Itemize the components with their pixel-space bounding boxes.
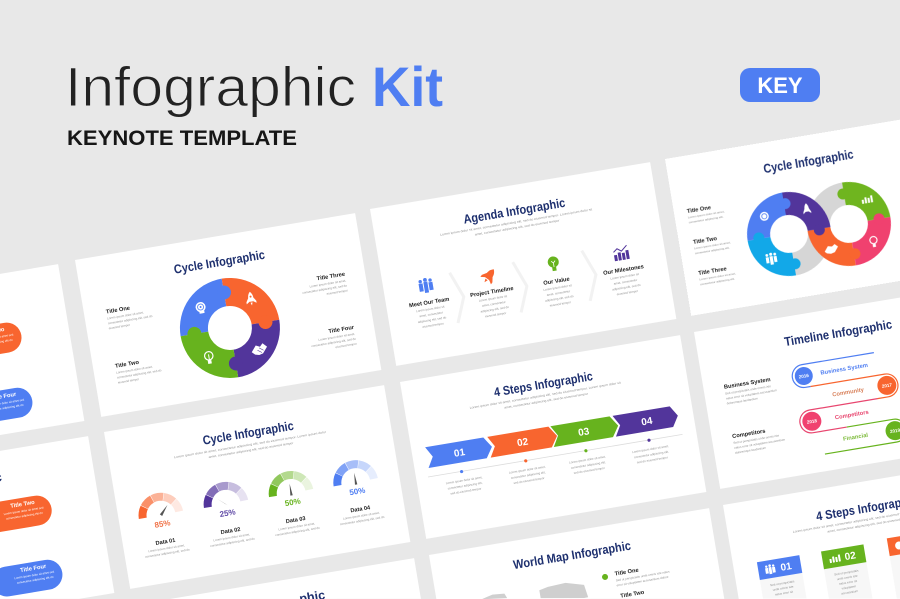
step card 02 — [821, 544, 873, 599]
column: Our Value: adipiscing elit, sed do — [545, 294, 574, 303]
milestone: 2018: 2018 — [806, 418, 818, 425]
gauge: Data 02: consectetur adipiscing elit, sed do — [210, 537, 255, 548]
icon: handshake — [251, 343, 268, 356]
text: step captions: Lorem ipsum dolor sit amet, — [569, 455, 606, 465]
pill: Title Four blue: Title Four — [20, 564, 47, 574]
text: Title Three: consectetur adipiscing elit, sed do — [302, 283, 348, 295]
step card 02: unde omnis iste — [836, 574, 858, 581]
column: Project Timeline — [466, 262, 518, 320]
text: Title Three: eiusmod tempor — [326, 288, 348, 296]
label: Community: Community — [832, 387, 865, 398]
text: intro: amet, consectetur adipiscing elit, sed do eiusmod tempor — [208, 441, 294, 459]
column: Meet Our Team: eiusmod tempor — [422, 321, 444, 329]
text: intro: Lorem ipsum dolor sit amet, consectetur adipiscing elit, sed do eiusmod tempor. Lorem ipsum dolor — [174, 430, 326, 459]
gauge: Data 03: Data 03 — [285, 516, 306, 525]
text: Title Four: Lorem ipsum dolor sit amet, — [318, 332, 356, 342]
label: Competitors: Competitors — [835, 410, 869, 421]
panel: 4 steps arrows slide — [400, 335, 706, 539]
gauge: Data 01: 85% — [154, 518, 171, 530]
step card 03 — [887, 531, 900, 599]
text: Title Three: Lorem ipsum dolor sit amet, — [699, 271, 736, 281]
text: Title One: Title One — [106, 306, 131, 316]
panel: cycle donut slide — [75, 213, 381, 417]
panel: 4 steps boxes slide — [723, 458, 900, 599]
text: Competitors: Competitors — [732, 429, 766, 440]
text: Title Two: eiusmod tempor — [117, 377, 139, 385]
icon: team — [765, 252, 778, 266]
column: Our Value: Lorem ipsum dolor sit — [543, 283, 572, 292]
column: Meet Our Team: Meet Our Team — [409, 297, 450, 309]
text: step captions: sed do eiusmod tempor — [513, 476, 545, 485]
panel: infinity cycle slide — [665, 112, 900, 316]
gauge: Data 02: 25% — [219, 507, 236, 519]
pill: Title Two orange — [0, 320, 24, 367]
column: Our Milestones: amet, consectetur — [613, 278, 638, 286]
icon: rocket — [479, 265, 499, 286]
panel: left partial slide with pills (upper) — [0, 264, 84, 468]
column: Our Value: Our Value — [543, 277, 570, 287]
badge: KEY: KEY — [757, 73, 803, 98]
step card 02: natus error sit — [839, 579, 858, 586]
gauge: Data 04: Lorem ipsum dolor sit amet, — [343, 511, 380, 521]
gauge: Data 03: 50% — [284, 497, 301, 508]
gauge: Data 03 — [266, 471, 320, 537]
text: Title One: Lorem ipsum dolor sit amet, — [107, 310, 144, 320]
gauge: Data 01 — [136, 493, 190, 559]
text: Title Three — [300, 272, 348, 300]
icon: head target — [195, 301, 207, 314]
text: Title One — [106, 302, 154, 330]
chevron dividers — [450, 249, 600, 323]
legend: Title One: Sed ut perspiciatis unde omnis iste natus — [615, 569, 670, 582]
text: Title Two: Lorem ipsum dolor sit amet, — [116, 365, 153, 375]
text: Competitors: Sed ut perspiciatis unde omnis iste — [733, 433, 780, 445]
gauge: Data 02 — [201, 482, 255, 548]
text: step captions: sed do eiusmod tempor — [573, 466, 605, 475]
icon: rocket — [802, 203, 811, 214]
step 03 arrow: 03 — [577, 426, 591, 439]
column: Our Milestones: eiusmod tempor — [616, 289, 638, 296]
text: Title Four: eiusmod tempor — [335, 342, 357, 349]
text: Title Two: consectetur adipiscing elit. — [695, 246, 730, 255]
gauge: Data 04: Data 04 — [350, 505, 372, 514]
map silhouette — [481, 579, 588, 599]
column: Project Timeline: adipiscing elit, sed do — [480, 305, 510, 314]
text: Competitors: doloremque laudantium — [735, 446, 767, 455]
icon: target head — [759, 211, 769, 221]
gauge: Data 04 — [331, 461, 385, 526]
chart: infinity puzzle loop — [741, 176, 897, 282]
icon: rocket — [245, 291, 257, 306]
timeline line — [428, 434, 683, 477]
text: Title One: consectetur adipiscing elit. — [688, 215, 724, 224]
title: Infographic Kit: Infographic — [65, 55, 356, 118]
panel: agenda slide — [370, 162, 676, 366]
text: Title Two — [693, 234, 732, 255]
column: Project Timeline: amet, consectetur — [482, 300, 506, 308]
text: Business System: Sed ut perspiciatis unde omnis iste — [725, 384, 771, 396]
text: Title Four: consectetur adipiscing elit, sed do — [311, 337, 356, 348]
column: Project Timeline: Project Timeline — [470, 286, 514, 299]
milestone: 2017: 2017 — [881, 382, 893, 389]
legend: Title One — [601, 563, 671, 590]
text: Business System: Business System — [724, 377, 771, 391]
column: Our Milestones: Lorem ipsum dolor sit — [610, 272, 639, 281]
column: Our Milestones — [599, 243, 648, 298]
text: Title Three: Title Three — [316, 272, 346, 282]
text: Title One: Lorem ipsum dolor sit amet, — [688, 209, 725, 219]
icon: chart — [613, 245, 630, 261]
step 02 arrow — [487, 425, 561, 468]
pill: Title Two orange: Title Two — [10, 500, 36, 510]
gauge: Data 03: Lorem ipsum dolor sit amet, — [278, 521, 315, 532]
text: Title Two — [115, 356, 163, 385]
text: Business System: natus error sit voluptatem accusantium — [726, 388, 778, 401]
column: Meet Our Team — [405, 275, 453, 331]
text: Title Four: Title Four — [328, 325, 355, 335]
step card 02: accusantium — [841, 589, 859, 596]
chart: puzzle donut — [172, 270, 288, 386]
text: Title Three: Title Three — [698, 266, 727, 277]
text: intro — [174, 430, 327, 465]
label: Business System: Business System — [820, 363, 868, 377]
step card 02: 02 — [844, 550, 857, 563]
panel: world map slide — [429, 508, 724, 599]
gauge: Data 02: Lorem ipsum dolor sit amet, — [213, 532, 250, 542]
text: Title Three — [698, 265, 737, 286]
text: Title One — [687, 203, 726, 224]
step 02 arrow: 02 — [516, 436, 530, 449]
text: Title One: eiusmod tempor — [108, 323, 130, 330]
pill: Title Two orange: Lorem ipsum dolor sit amet sed — [3, 505, 44, 516]
step 01 arrow — [425, 436, 495, 478]
chart: snake timeline — [791, 349, 900, 457]
panel: bottom partial slide — [170, 558, 421, 599]
step card 01: Sed ut perspiciatis — [770, 579, 795, 587]
text: step captions: consectetur adipiscing elit, — [447, 481, 483, 491]
pill: Title Four blue: consectetur adipiscing elit do — [16, 575, 54, 585]
column: Our Milestones: adipiscing elit, sed do — [612, 283, 641, 292]
icon: team — [418, 277, 434, 294]
column: Meet Our Team: Lorem ipsum dolor sit — [416, 305, 445, 313]
column: Meet Our Team: amet, consectetur — [419, 310, 443, 318]
text: Title Three: consectetur adipiscing elit. — [700, 277, 735, 286]
heading: Cycle Infographic — [202, 419, 295, 448]
text: Title Three: Lorem ipsum dolor sit amet, — [309, 279, 347, 289]
legend: Title One: error sit voluptatem accusantium dolore — [616, 575, 669, 587]
text: Title One: Title One — [687, 205, 711, 215]
text: step captions: Lorem ipsum dolor sit amet, — [446, 475, 483, 485]
legend: Title One: Title One — [614, 568, 639, 578]
step 04 arrow: 04 — [641, 416, 654, 428]
heading: Cycle Infographic — [173, 248, 266, 277]
text: Competitors — [732, 426, 787, 455]
text: intro: amet, consectetur adipiscing elit, sed do eiusmod tempor — [474, 218, 560, 237]
heading: 4 Steps Infographic — [493, 369, 594, 400]
text: intro: Lorem ipsum dolor sit amet, consectetur adipiscing elit, sed do eiusmod tempor. Lorem ipsum dolor sit — [440, 207, 593, 237]
step card 02: Sed ut perspiciatis — [834, 568, 859, 577]
text: Title Two: Title Two — [693, 236, 718, 246]
column: Project Timeline: Lorem ipsum dolor sit — [478, 294, 508, 303]
column: Our Milestones: Our Milestones — [603, 264, 644, 277]
text: step captions: sed do eiusmod tempor — [637, 455, 668, 464]
text: Business System: doloremque laudantium — [726, 396, 759, 406]
step 01 arrow: 01 — [453, 447, 466, 460]
pill: Title Two orange — [0, 493, 54, 540]
text: step captions: consectetur adipiscing elit, — [571, 460, 606, 470]
icon: growth chart — [861, 195, 873, 204]
step card 01: unde omnis iste — [772, 584, 794, 592]
icon: bulb — [547, 256, 560, 272]
step card 01: natus error sit — [775, 590, 793, 597]
icon: light bulb — [204, 351, 214, 364]
title: Infographic Kit: Kit — [372, 55, 443, 118]
column: Our Value: amet, consectetur — [546, 289, 571, 297]
column: Our Value: eiusmod tempor — [549, 300, 571, 308]
text: intro: amet, consectetur adipiscing elit, sed do eiusmod tempor — [504, 392, 588, 410]
milestone: 2016: 2016 — [798, 373, 810, 379]
panel: gauges slide — [104, 385, 410, 589]
pill: Title Four blue — [0, 385, 35, 432]
text: Title Two: consectetur adipiscing elit, sed do — [117, 368, 162, 380]
step card 01 — [757, 555, 807, 599]
step 03 arrow — [550, 415, 622, 457]
text: Business System — [724, 376, 778, 406]
text: step captions: Lorem ipsum dolor sit amet, — [509, 465, 546, 475]
text: Title Two: Title Two — [115, 360, 140, 370]
step 04 arrow — [613, 405, 681, 447]
text: step captions: consectetur adipiscing elit, — [634, 450, 669, 459]
text: step captions: Lorem ipsum dolor sit amet, — [632, 444, 669, 454]
gauge: Data 01: Data 01 — [155, 538, 176, 547]
panel: left partial slide with pills (lower) — [0, 436, 114, 599]
gauge: Data 01: consectetur adipiscing elit, sed do — [145, 547, 190, 559]
subtitle: keynote template: KEYNOTE TEMPLATE — [67, 126, 297, 150]
text: Title Four — [309, 325, 358, 353]
gauge: Data 02: Data 02 — [220, 527, 241, 536]
column: Project Timeline: eiusmod tempor — [485, 311, 507, 318]
gauge: Data 04: consectetur adipiscing elit, sed do — [340, 515, 385, 526]
text: Title Two: Lorem ipsum dolor sit amet, — [694, 240, 731, 250]
text: Competitors: natus error sit voluptatem accusantium — [734, 437, 786, 450]
pill: Title Two orange: consectetur adipiscing elit do — [6, 511, 43, 521]
text: step captions: consectetur adipiscing elit, — [510, 470, 546, 480]
text: intro — [440, 207, 594, 242]
text: intro — [469, 381, 622, 415]
badge: KEY — [740, 68, 820, 102]
pill: Title Four blue: Lorem ipsum dolor sit amet sed — [14, 570, 55, 580]
gauge: Data 01: Lorem ipsum dolor sit amet, — [148, 543, 185, 553]
step card 02: voluptatem — [841, 584, 857, 591]
heading: Agenda Infographic — [462, 196, 566, 227]
text: step captions: sed do eiusmod tempor — [450, 487, 482, 496]
gauge: Data 04: 50% — [349, 486, 366, 497]
step card 01: 01 — [780, 561, 793, 574]
column: Meet Our Team: adipiscing elit, sed do — [418, 315, 447, 324]
text: intro: Lorem ipsum dolor sit amet, consectetur adipiscing elit, sed do eiusmod tempor. Lorem ipsum dolor sit — [469, 381, 621, 410]
label: Financial: Financial — [843, 433, 869, 443]
column: Our Value — [538, 254, 575, 308]
gauge: Data 03: consectetur adipiscing elit, sed do — [275, 526, 320, 537]
text: step captions — [446, 444, 671, 496]
pill: Title Four blue — [0, 557, 65, 599]
heading: World Map Infographic — [512, 539, 632, 572]
icon: bulb — [869, 236, 878, 248]
heading: Cycle Infographic — [762, 147, 854, 176]
text: Title One: consectetur adipiscing elit, sed do — [108, 314, 153, 325]
panel: timeline slide — [694, 285, 900, 489]
icon: handshake — [824, 244, 839, 255]
